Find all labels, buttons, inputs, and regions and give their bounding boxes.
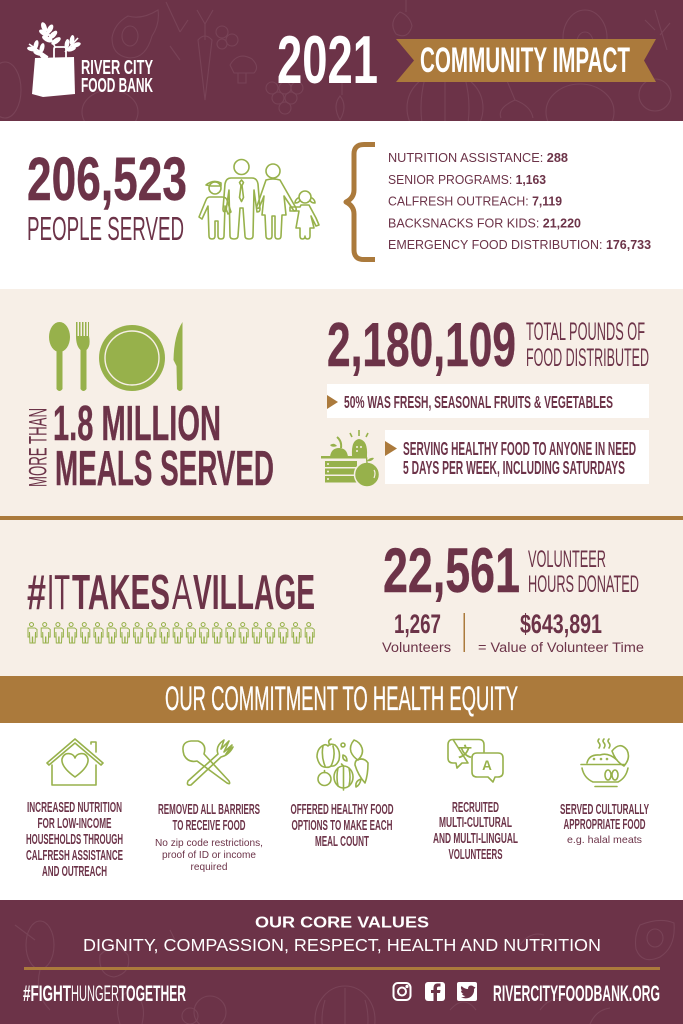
hashtag: fight hunger together: TOGETHER <box>119 981 186 1006</box>
heading: it takes a village: # <box>27 566 46 620</box>
item: removed barriers: REMOVED ALL BARRIERS <box>158 802 260 818</box>
icon: grocery bag <box>32 47 75 97</box>
icon: vegetables <box>317 739 368 790</box>
item: increased nutrition: HOUSEHOLDS THROUGH <box>26 832 123 848</box>
item: healthy food options: OFFERED HEALTHY FOOD <box>290 802 394 818</box>
stat: volunteers count: 1,267 <box>394 609 441 639</box>
icon: twitter <box>457 982 477 1001</box>
item: increased nutrition: FOR LOW-INCOME <box>38 816 112 832</box>
item: removed barriers: proof of ID or income <box>162 849 256 861</box>
item: increased nutrition: CALFRESH ASSISTANCE <box>26 848 123 864</box>
stat: 1.8 million meals served: MEALS SERVED <box>55 442 274 496</box>
logo wordmark <box>81 56 153 97</box>
list: program counts: CALFRESH OUTREACH: 7,119 <box>388 194 562 208</box>
stat: volunteers count <box>382 609 451 655</box>
item: multi-cultural volunteers <box>433 740 518 863</box>
item: increased nutrition <box>26 739 123 880</box>
text: core values: OUR CORE VALUES <box>255 914 429 932</box>
icon: house with heart <box>47 739 103 785</box>
stat: 206,523: 206,523 <box>27 145 187 213</box>
heading: it takes a village: A <box>172 566 192 620</box>
panel: people served <box>27 144 651 260</box>
item: healthy food options: OPTIONS TO MAKE EACH <box>292 818 392 834</box>
item: removed barriers: TO RECEIVE FOOD <box>172 818 246 834</box>
icon: wheat and greens <box>27 21 81 61</box>
list: program counts <box>388 151 651 252</box>
list: program counts: BACKSNACKS FOR KIDS: 21,220 <box>388 216 581 230</box>
heading: it takes a village: VILLAGE <box>193 566 315 620</box>
stat: 2,180,109 pounds: 2,180,109 <box>327 311 516 380</box>
callout: serving healthy food <box>385 430 649 484</box>
item: increased nutrition: INCREASED NUTRITION <box>27 800 122 816</box>
item: healthy food options <box>290 739 394 850</box>
heading: it takes a village <box>27 566 315 620</box>
stat: value of volunteer time: $643,891 <box>520 609 602 639</box>
text: core values <box>83 914 601 955</box>
item: multi-cultural volunteers: AND MULTI-LINGUAL <box>433 831 518 847</box>
item: removed barriers: required <box>190 861 228 873</box>
panel: meals and pounds <box>0 289 683 516</box>
label: volunteer hours donated: VOLUNTEER <box>528 546 606 573</box>
hashtag: fight hunger together: HUNGER <box>71 981 119 1006</box>
icon row: volunteers <box>28 622 314 643</box>
item: increased nutrition: AND OUTREACH <box>42 864 107 880</box>
hashtag: fight hunger together: #FIGHT <box>23 981 71 1006</box>
text: core values: DIGNITY, COMPASSION, RESPECT, HEALTH AND NUTRITION <box>83 935 601 955</box>
item: multi-cultural volunteers: RECRUITED <box>452 800 499 816</box>
stat: 1.8 million meals served <box>53 397 274 496</box>
icon: crossed spoon and fork <box>183 740 233 785</box>
label: more than: MORE THAN <box>24 408 52 487</box>
logo: River City Food Bank <box>27 21 153 97</box>
label: people served: PEOPLE SERVED <box>27 210 184 247</box>
logo wordmark: RIVER CITY <box>81 56 153 79</box>
title: year: 2021 <box>277 22 378 98</box>
stat: volunteers count: Volunteers <box>382 640 451 655</box>
item: multi-cultural volunteers: 文 <box>458 744 472 760</box>
item: multi-cultural volunteers: VOLUNTEERS <box>448 847 503 863</box>
icon: place setting <box>49 322 182 391</box>
list: program counts: NUTRITION ASSISTANCE: 288 <box>388 151 568 165</box>
stat: 22,561 hours: 22,561 <box>383 536 520 606</box>
stat: value of volunteer time <box>478 609 644 655</box>
list: program counts: EMERGENCY FOOD DISTRIBUTION: 176,733 <box>388 238 651 252</box>
item: healthy food options: MEAL COUNT <box>315 834 369 850</box>
item: removed barriers <box>155 740 263 873</box>
panel: header <box>0 0 683 121</box>
icon: instagram <box>394 983 410 1000</box>
label: volunteer hours donated <box>528 546 639 598</box>
panel: volunteers <box>0 516 683 676</box>
icon: translation speech bubbles <box>448 740 503 782</box>
stat: 1.8 million meals served: 1.8 MILLION <box>53 397 221 451</box>
item: culturally appropriate food: e.g. halal meats <box>567 834 642 846</box>
item: culturally appropriate food <box>560 739 649 846</box>
item: removed barriers: No zip code restrictions, <box>155 837 263 849</box>
item: multi-cultural volunteers: MULTI-CULTURAL <box>439 815 512 831</box>
heading: it takes a village: TAKES <box>72 566 170 620</box>
icon: bowl with steam <box>581 739 628 786</box>
heading: it takes a village: IT <box>47 566 70 620</box>
icon: brace <box>346 144 375 260</box>
icon: facebook <box>425 982 445 1001</box>
logo wordmark: FOOD BANK <box>81 74 153 97</box>
callout: fresh produce <box>327 384 649 418</box>
item: multi-cultural volunteers: A <box>482 758 492 773</box>
list: program counts: SENIOR PROGRAMS: 1,163 <box>388 173 546 187</box>
stat: value of volunteer time: = Value of Volunteer Time <box>478 640 644 655</box>
label: total pounds of food distributed <box>526 318 649 372</box>
banner: health equity heading <box>0 676 683 723</box>
icon: family <box>199 160 319 239</box>
icon: crate of produce <box>321 430 380 487</box>
hashtag: fight hunger together <box>23 981 186 1006</box>
panel: footer <box>0 900 683 1024</box>
panel: health equity items <box>26 739 649 880</box>
